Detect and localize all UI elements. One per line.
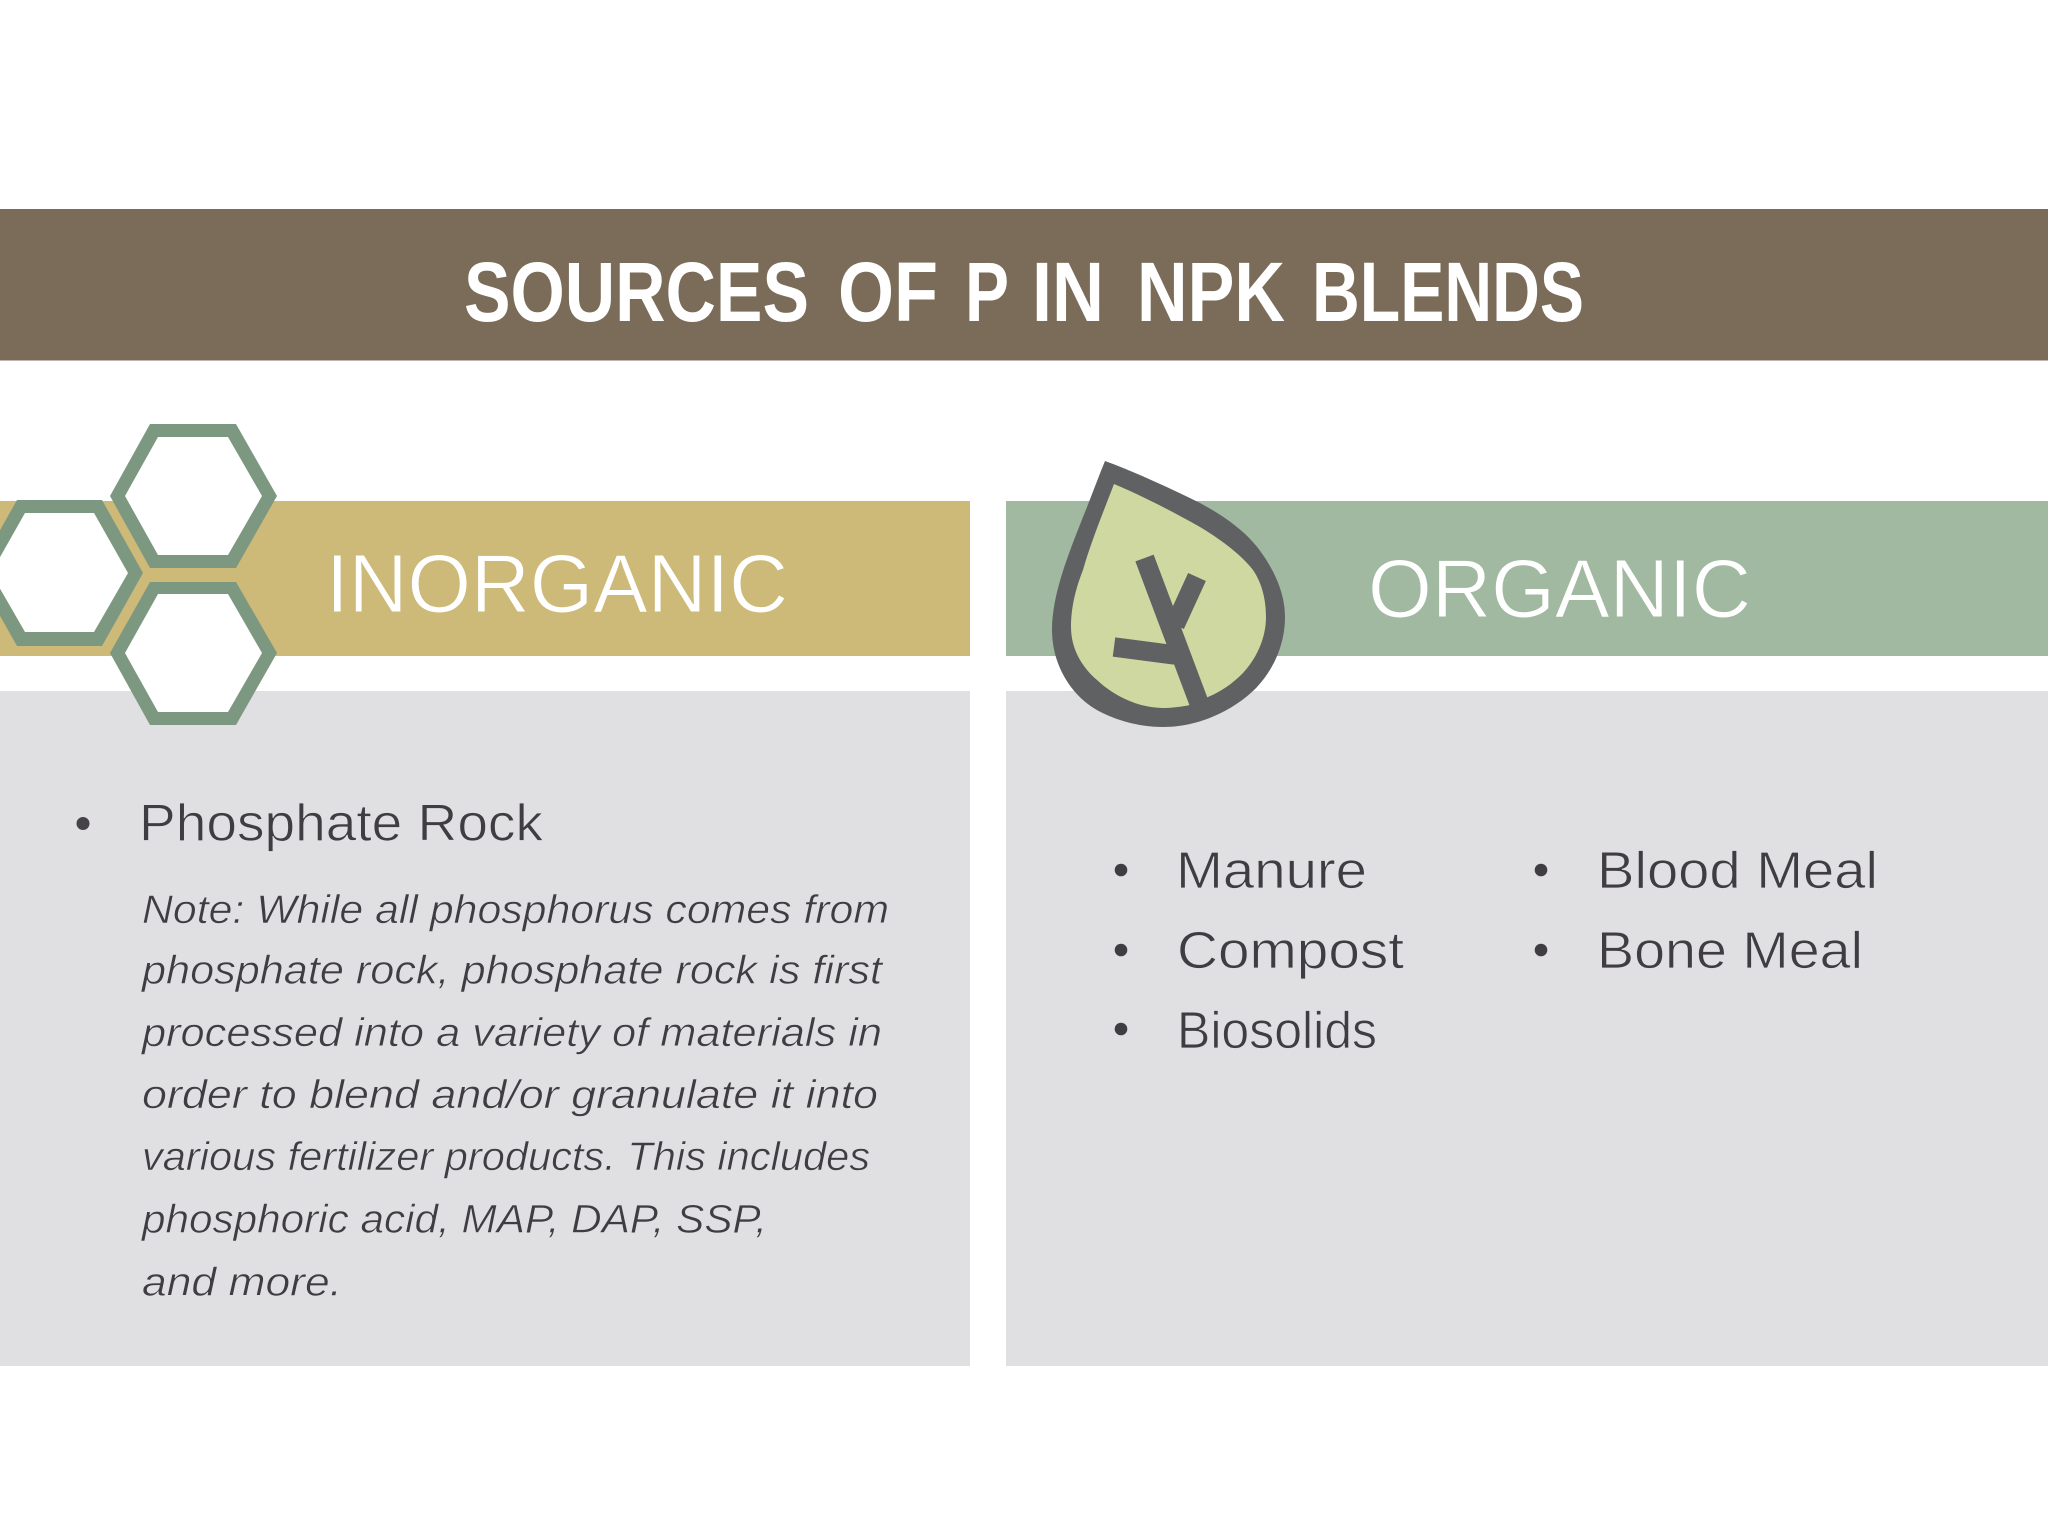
inorganic content background <box>0 691 970 1366</box>
list: organic sources, column one: Compost <box>1177 922 1405 980</box>
note text block: phosphate rock, phosphate rock is first <box>141 948 884 992</box>
title: OF <box>838 245 938 339</box>
note text block: phosphoric acid, MAP, DAP, SSP, <box>141 1198 767 1242</box>
title: IN <box>1032 245 1104 339</box>
note text block <box>141 888 889 1304</box>
organic heading: ORGANIC <box>1368 542 1751 635</box>
note text block: Note: While all phosphorus comes from <box>142 888 889 932</box>
title: BLENDS <box>1312 245 1584 339</box>
note text block: order to blend and/or granulate it into <box>142 1073 878 1117</box>
organic content background <box>1006 691 2048 1366</box>
list: organic sources, column one: Biosolids <box>1177 1002 1377 1060</box>
note text block: processed into a variety of materials in <box>141 1011 882 1055</box>
panel: organic <box>1006 461 2048 1366</box>
title: NPK <box>1137 245 1285 339</box>
note text block: and more. <box>142 1260 342 1304</box>
bullet: phosphate rock: Phosphate Rock <box>139 794 544 852</box>
organic header band <box>1006 501 2048 656</box>
title <box>464 245 1584 339</box>
list: organic sources, column two: Blood Meal <box>1597 842 1878 900</box>
inorganic heading: INORGANIC <box>326 537 788 630</box>
list: organic sources, column one: Manure <box>1176 842 1367 900</box>
panel: inorganic <box>0 424 970 1366</box>
title: SOURCES <box>464 245 809 339</box>
title: P <box>965 245 1009 339</box>
icon: hexagons <box>0 424 277 725</box>
list: organic sources, column one <box>1115 842 1405 1060</box>
title banner <box>0 209 2048 360</box>
list: organic sources, column two: Bone Meal <box>1597 922 1863 980</box>
list: organic sources, column two <box>1535 842 1878 980</box>
note text block: various fertilizer products. This includes <box>142 1135 870 1179</box>
icon: leaf <box>1052 461 1285 727</box>
inorganic header band <box>0 501 970 656</box>
